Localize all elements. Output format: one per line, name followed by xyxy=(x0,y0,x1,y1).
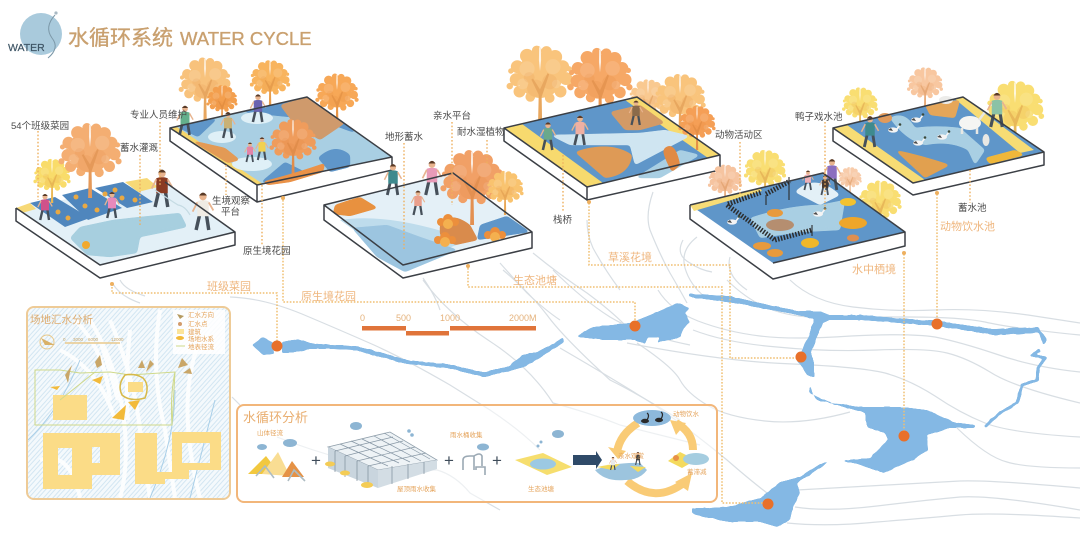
icon: mountains: 山体径流 xyxy=(257,428,284,437)
callout leader lines xyxy=(38,122,970,250)
pond water xyxy=(352,225,458,272)
scale bar: 2000M xyxy=(509,313,537,323)
callout labels: 鸭子戏水池 xyxy=(795,111,843,123)
panel: site catchment analysis xyxy=(27,307,230,499)
orange area labels: 草溪花境 xyxy=(608,250,652,264)
legend: 场地水系 xyxy=(188,334,214,343)
compass and small scale xyxy=(40,335,124,349)
callout labels: 蓄水灌溉 xyxy=(120,142,159,154)
plus signs xyxy=(311,451,502,470)
title logo xyxy=(8,11,62,58)
legend xyxy=(173,310,225,354)
icon: greenhouse xyxy=(325,422,437,493)
callout labels: 地形蓄水 xyxy=(385,131,424,143)
legend: 汇水方向 xyxy=(188,310,214,319)
water cycle heading: 水循环分析 xyxy=(243,410,308,425)
fences xyxy=(727,177,812,240)
panel: animal drinking pond xyxy=(833,67,1044,195)
scale bar: 500 xyxy=(396,313,411,323)
cycle diagram: 动物饮水 xyxy=(673,409,700,418)
site yellow plots xyxy=(43,382,221,489)
animals xyxy=(959,116,981,130)
legend: 地表径流 xyxy=(188,342,214,351)
pond xyxy=(70,213,187,257)
panel: garden plot xyxy=(16,123,235,278)
cycle diagram: 蓄滞减 xyxy=(687,467,707,476)
title: 水循环系统 WATER CYCLE xyxy=(68,27,312,50)
stream xyxy=(890,116,985,165)
orange area labels: 班级菜园 xyxy=(207,280,251,293)
icon: ecological pond: 生态池塘 xyxy=(528,484,554,493)
contour lines background xyxy=(113,192,1080,525)
compass and small scale: 3000 xyxy=(73,337,84,342)
legend: 建筑 xyxy=(188,327,202,336)
title logo: WATER xyxy=(8,42,45,54)
icon: rain barrels xyxy=(450,430,489,475)
orange area labels: 动物饮水池 xyxy=(940,219,995,233)
icon: greenhouse: 屋顶雨水收集 xyxy=(397,484,436,493)
panel: water cycle analysis xyxy=(237,405,717,502)
panel: ecological pond xyxy=(324,150,532,278)
arrow xyxy=(573,451,602,469)
icon: mountains xyxy=(248,428,305,481)
orange area labels xyxy=(207,219,995,303)
legend: 汇水点 xyxy=(188,319,208,328)
cycle diagram: 亲水观赏 xyxy=(618,451,644,460)
callout labels: 动物活动区 xyxy=(715,129,763,141)
icon: rain barrels: 雨水桶收集 xyxy=(450,430,483,439)
water channel xyxy=(550,130,690,165)
panel: grass creek border xyxy=(504,46,720,200)
plus signs: + xyxy=(444,451,454,470)
icon: ecological pond xyxy=(515,430,572,493)
plus signs: + xyxy=(311,451,321,470)
river lakes xyxy=(252,294,1047,527)
callout labels: 亲水平台 xyxy=(433,110,471,122)
callout labels: 54个班级菜园 xyxy=(11,120,69,132)
leader lines: block to lake xyxy=(112,194,937,503)
scale bar: 0 xyxy=(360,313,365,323)
cycle diagram xyxy=(595,409,709,493)
callout labels: 耐水湿植物 xyxy=(457,126,505,138)
catchment channels xyxy=(35,370,175,425)
callout labels: 平台 xyxy=(221,206,240,218)
compass and small scale: 12000 xyxy=(111,337,124,342)
scale bar: 1000 xyxy=(440,313,460,323)
callout labels xyxy=(11,109,987,257)
callout labels: 生境观察 xyxy=(212,195,251,207)
callout labels: 栈桥 xyxy=(553,214,572,226)
panel: native habitat garden xyxy=(170,58,392,202)
water pool xyxy=(750,200,845,238)
callout labels: 专业人员维护 xyxy=(130,109,187,121)
callout labels: 原生境花园 xyxy=(243,245,291,257)
compass and small scale: 6000 xyxy=(88,337,99,342)
catchment title: 场地汇水分析 xyxy=(30,313,93,326)
vegetable beds xyxy=(30,182,153,227)
orange area labels: 原生境花园 xyxy=(301,289,356,303)
orange anchor dots xyxy=(110,191,942,510)
orange area labels: 生态池塘 xyxy=(513,273,557,287)
orange area labels: 水中栖境 xyxy=(852,262,896,276)
crops xyxy=(42,188,138,249)
dark water patches xyxy=(177,97,360,183)
compass and small scale: 0 xyxy=(63,337,66,342)
callout labels: 蓄水池 xyxy=(958,202,987,214)
panel: habitat in water with animals xyxy=(690,150,905,279)
plus signs: + xyxy=(492,451,502,470)
scale bar xyxy=(360,313,537,336)
